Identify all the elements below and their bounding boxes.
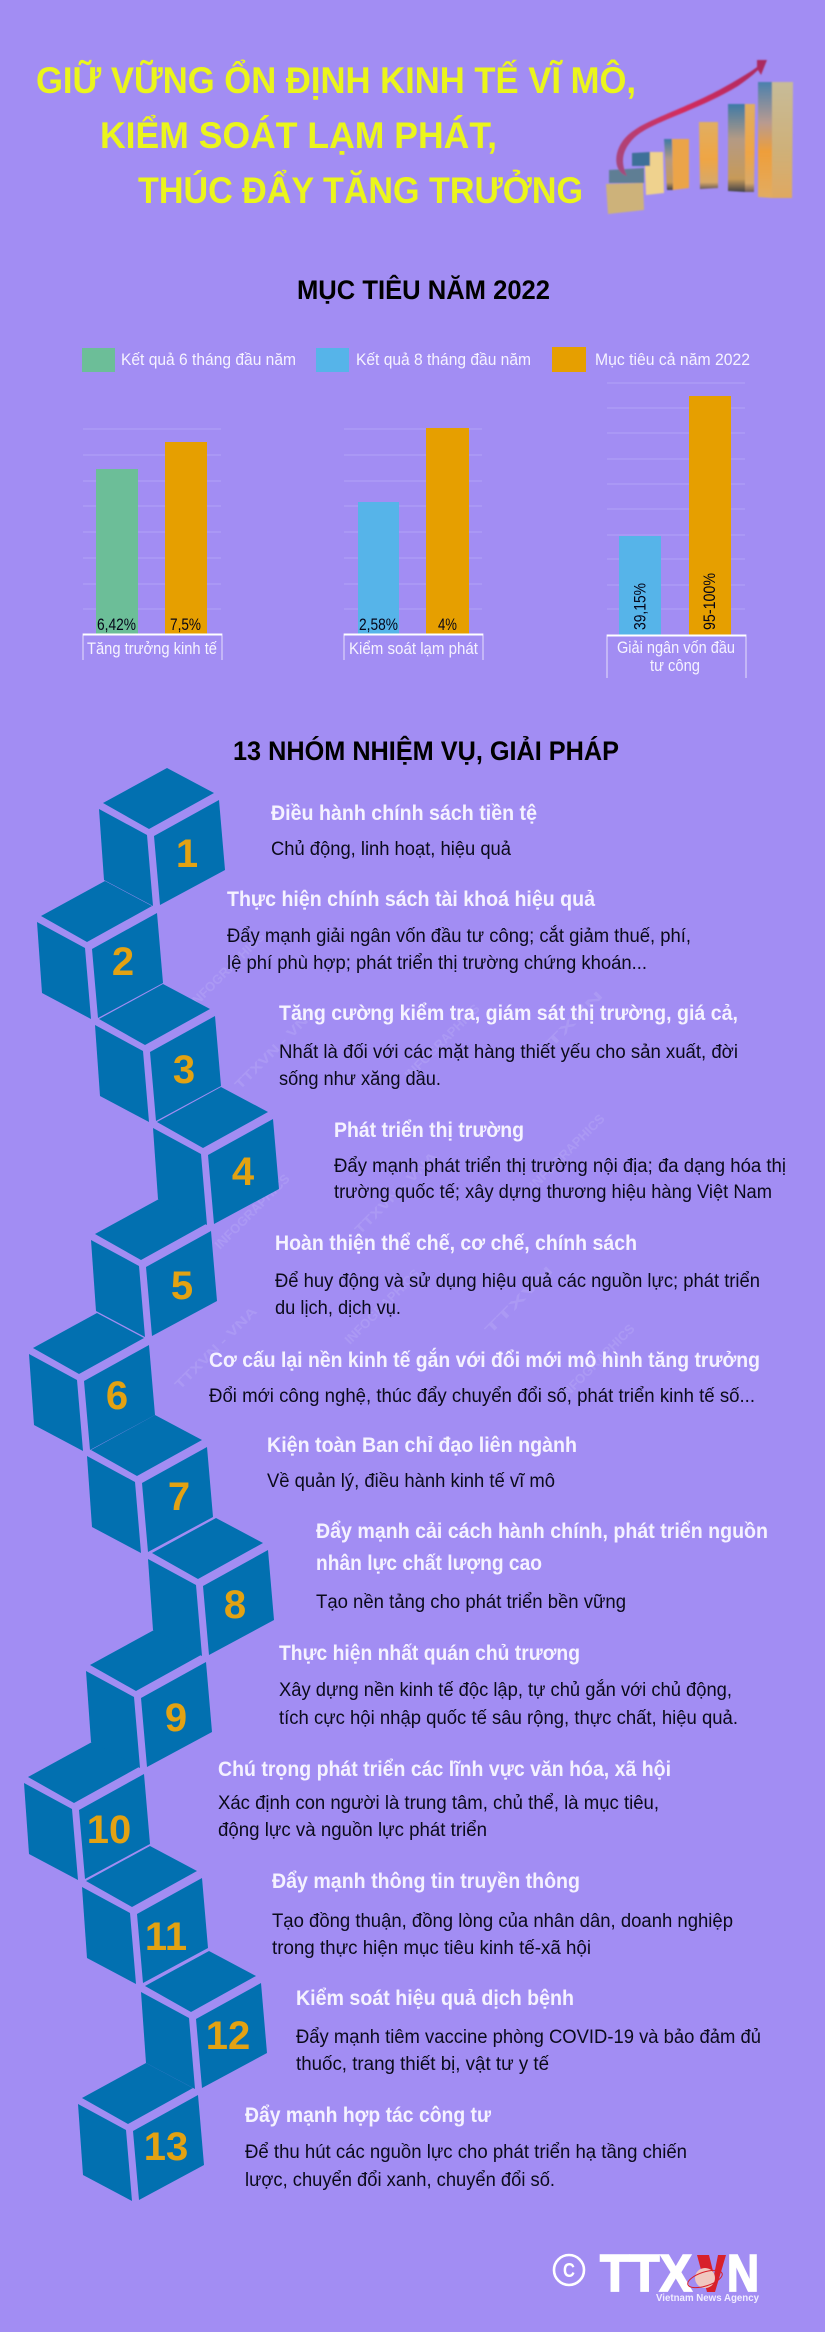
cube 5: 5 bbox=[171, 1264, 193, 1308]
logo: copyright TTXVN bbox=[554, 2245, 759, 2304]
item 11: trong thực hiện mục tiêu kinh tế-xã hội bbox=[272, 1938, 591, 1959]
item 4: Đẩy mạnh phát triển thị trường nội địa; đa dạng hóa thị bbox=[334, 1156, 786, 1177]
cube 9: 9 bbox=[165, 1696, 187, 1740]
item 12: Đẩy mạnh tiêm vaccine phòng COVID-19 và bảo đảm đủ bbox=[296, 2027, 761, 2048]
cube 13: 13 bbox=[144, 2125, 188, 2169]
item 5: du lịch, dịch vụ. bbox=[275, 1298, 401, 1319]
item 8: nhân lực chất lượng cao bbox=[316, 1552, 542, 1575]
cube 11: 11 bbox=[145, 1915, 187, 1959]
cube 10: 10 bbox=[87, 1808, 131, 1852]
item 10: động lực và nguồn lực phát triển bbox=[218, 1820, 487, 1841]
item 12: Kiểm soát hiệu quả dịch bệnh bbox=[296, 1987, 574, 2010]
item 3: Tăng cường kiểm tra, giám sát thị trường, giá cả, bbox=[279, 1002, 738, 1025]
chart: economic growth bbox=[83, 429, 222, 660]
chart: inflation control: 2,58% bbox=[359, 615, 398, 634]
item 6 bbox=[209, 1348, 760, 1407]
watermarks: INFOGRAPHICS bbox=[527, 1111, 608, 1192]
cube 10 bbox=[24, 1742, 150, 1880]
chart: public investment disbursement: 95-100% bbox=[700, 573, 719, 630]
chart: economic growth: 7,5% bbox=[170, 615, 201, 634]
icon: rising bar chart with arrow bbox=[606, 60, 793, 214]
item 2: Thực hiện chính sách tài khoá hiệu quả bbox=[227, 888, 595, 911]
item 4 bbox=[334, 1119, 786, 1203]
item 11: Tạo đồng thuận, đồng lòng của nhân dân, doanh nghiệp bbox=[272, 1911, 733, 1932]
item 5: Để huy động và sử dụng hiệu quả các nguồn lực; phát triển bbox=[275, 1271, 760, 1292]
item 13 bbox=[245, 2104, 687, 2191]
watermarks: TTXVN bbox=[482, 1263, 556, 1337]
item 2: Đẩy mạnh giải ngân vốn đầu tư công; cắt giảm thuế, phí, bbox=[227, 925, 691, 947]
cube 6: 6 bbox=[106, 1374, 128, 1418]
item 11 bbox=[272, 1870, 733, 1959]
watermarks: TTXVN - VNA bbox=[352, 1148, 440, 1237]
item 11: Đẩy mạnh thông tin truyền thông bbox=[272, 1870, 580, 1893]
title: THÚC ĐẨY TĂNG TRƯỞNG bbox=[138, 169, 583, 211]
chart: economic growth: 6,42% bbox=[97, 615, 136, 634]
chart: inflation control: Kiểm soát lạm phát bbox=[349, 640, 478, 658]
logo: copyright TTXVN: C bbox=[563, 2260, 575, 2282]
chart: public investment disbursement bbox=[607, 383, 746, 678]
item 13: Để thu hút các nguồn lực cho phát triển hạ tầng chiến bbox=[245, 2142, 687, 2163]
item 2 bbox=[227, 888, 691, 974]
item 5 bbox=[275, 1232, 760, 1319]
item 9: Thực hiện nhất quán chủ trương bbox=[279, 1642, 580, 1665]
item 9 bbox=[279, 1642, 738, 1729]
cube 8 bbox=[148, 1518, 274, 1656]
cube 4 bbox=[153, 1087, 279, 1225]
cube 7: 7 bbox=[168, 1475, 190, 1519]
cube 5 bbox=[91, 1199, 217, 1337]
item 4: trường quốc tế; xây dựng thương hiệu hàng Việt Nam bbox=[334, 1182, 772, 1203]
item 3 bbox=[279, 1002, 738, 1090]
cube 12: 12 bbox=[206, 2014, 250, 2058]
item 3: sống như xăng dầu. bbox=[279, 1069, 441, 1090]
cube 6 bbox=[29, 1313, 155, 1451]
cube 2 bbox=[37, 881, 163, 1019]
item 10: Chú trọng phát triển các lĩnh vực văn hóa, xã hội bbox=[218, 1758, 671, 1781]
cube 2: 2 bbox=[112, 940, 134, 984]
cube 7 bbox=[87, 1415, 213, 1553]
cube 9 bbox=[86, 1630, 212, 1768]
item 6: Cơ cấu lại nền kinh tế gắn với đổi mới mô hình tăng trưởng bbox=[209, 1348, 760, 1372]
item 10: Xác định con người là trung tâm, chủ thể, là mục tiêu, bbox=[218, 1793, 659, 1814]
legend: Kết quả 8 tháng đầu năm bbox=[356, 351, 531, 369]
watermarks: TTXVN - VNA bbox=[172, 1303, 260, 1392]
title: GIỮ VỮNG ỔN ĐỊNH KINH TẾ VĨ MÔ, bbox=[36, 58, 636, 101]
chart: inflation control bbox=[344, 428, 483, 660]
logo: copyright TTXVN: TTX bbox=[600, 2245, 692, 2303]
watermarks: INFOGRAPHICS bbox=[402, 1001, 483, 1082]
legend: Kết quả 6 tháng đầu năm bbox=[121, 351, 296, 369]
item 7: Kiện toàn Ban chỉ đạo liên ngành bbox=[267, 1434, 577, 1457]
chart: economic growth: Tăng trưởng kinh tế bbox=[87, 640, 217, 658]
cube 13 bbox=[78, 2063, 204, 2201]
cube 4: 4 bbox=[232, 1150, 255, 1194]
heading: targets 2022: MỤC TIÊU NĂM 2022 bbox=[297, 275, 550, 305]
watermarks: TTXVN bbox=[532, 988, 606, 1062]
cube 3: 3 bbox=[173, 1048, 195, 1092]
watermarks: INFOGRAPHICS bbox=[212, 1171, 293, 1252]
item 12: thuốc, trang thiết bị, vật tư y tế bbox=[296, 2054, 549, 2075]
item 8: Tạo nền tảng cho phát triển bền vững bbox=[316, 1592, 626, 1613]
logo: copyright TTXVN: Vietnam News Agency bbox=[656, 2292, 759, 2304]
item 13: lược, chuyển đổi xanh, chuyển đổi số. bbox=[245, 2170, 555, 2191]
item 7: Về quản lý, điều hành kinh tế vĩ mô bbox=[267, 1471, 555, 1492]
item 8: Đẩy mạnh cải cách hành chính, phát triển nguồn bbox=[316, 1520, 768, 1543]
title bbox=[36, 58, 636, 211]
cube 1: 1 bbox=[176, 832, 198, 876]
cube 8: 8 bbox=[224, 1583, 246, 1627]
legend bbox=[82, 347, 750, 372]
item 3: Nhất là đối với các mặt hàng thiết yếu cho sản xuất, đời bbox=[279, 1042, 738, 1063]
item 10 bbox=[218, 1758, 671, 1841]
item 6: Đổi mới công nghệ, thúc đẩy chuyển đổi số, phát triển kinh tế số... bbox=[209, 1386, 755, 1407]
item 9: tích cực hội nhập quốc tế sâu rộng, thực chất, hiệu quả. bbox=[279, 1708, 738, 1729]
cube 1 bbox=[99, 768, 225, 906]
item 7 bbox=[267, 1434, 577, 1492]
chart: inflation control: 4% bbox=[438, 615, 457, 634]
heading: 13 task groups: 13 NHÓM NHIỆM VỤ, GIẢI PHÁP bbox=[233, 736, 619, 766]
cube 11 bbox=[82, 1846, 208, 1984]
logo: copyright TTXVN: N bbox=[727, 2245, 759, 2303]
item 5: Hoàn thiện thể chế, cơ chế, chính sách bbox=[275, 1232, 637, 1255]
item 2: lệ phí phù hợp; phát triển thị trường chứng khoán... bbox=[227, 953, 647, 974]
item 13: Đẩy mạnh hợp tác công tư bbox=[245, 2104, 492, 2127]
watermarks: INFOGRAPHICS bbox=[342, 1266, 423, 1347]
chart: public investment disbursement: 39,15% bbox=[630, 583, 650, 630]
watermarks: INFOGRAPHICS bbox=[557, 1321, 638, 1402]
legend: Mục tiêu cả năm 2022 bbox=[595, 351, 750, 369]
watermarks: TTXVN - VNA bbox=[232, 1003, 320, 1092]
item 1 bbox=[271, 802, 537, 860]
item 8 bbox=[316, 1520, 768, 1613]
cube 12 bbox=[141, 1951, 267, 2089]
watermarks bbox=[172, 929, 638, 1402]
item 1: Điều hành chính sách tiền tệ bbox=[271, 802, 537, 825]
item 4: Phát triển thị trường bbox=[334, 1119, 524, 1142]
cube 3 bbox=[95, 984, 221, 1122]
item 1: Chủ động, linh hoạt, hiệu quả bbox=[271, 839, 511, 860]
item 12 bbox=[296, 1987, 761, 2075]
item 9: Xây dựng nền kinh tế độc lập, tự chủ gắn với chủ động, bbox=[279, 1679, 732, 1701]
chart: public investment disbursement: tư công bbox=[650, 657, 700, 675]
title: KIỂM SOÁT LẠM PHÁT, bbox=[100, 114, 497, 156]
watermarks: INFOGRAPHICS bbox=[187, 929, 268, 1010]
chart: public investment disbursement: Giải ngân vốn đầu bbox=[617, 639, 735, 657]
